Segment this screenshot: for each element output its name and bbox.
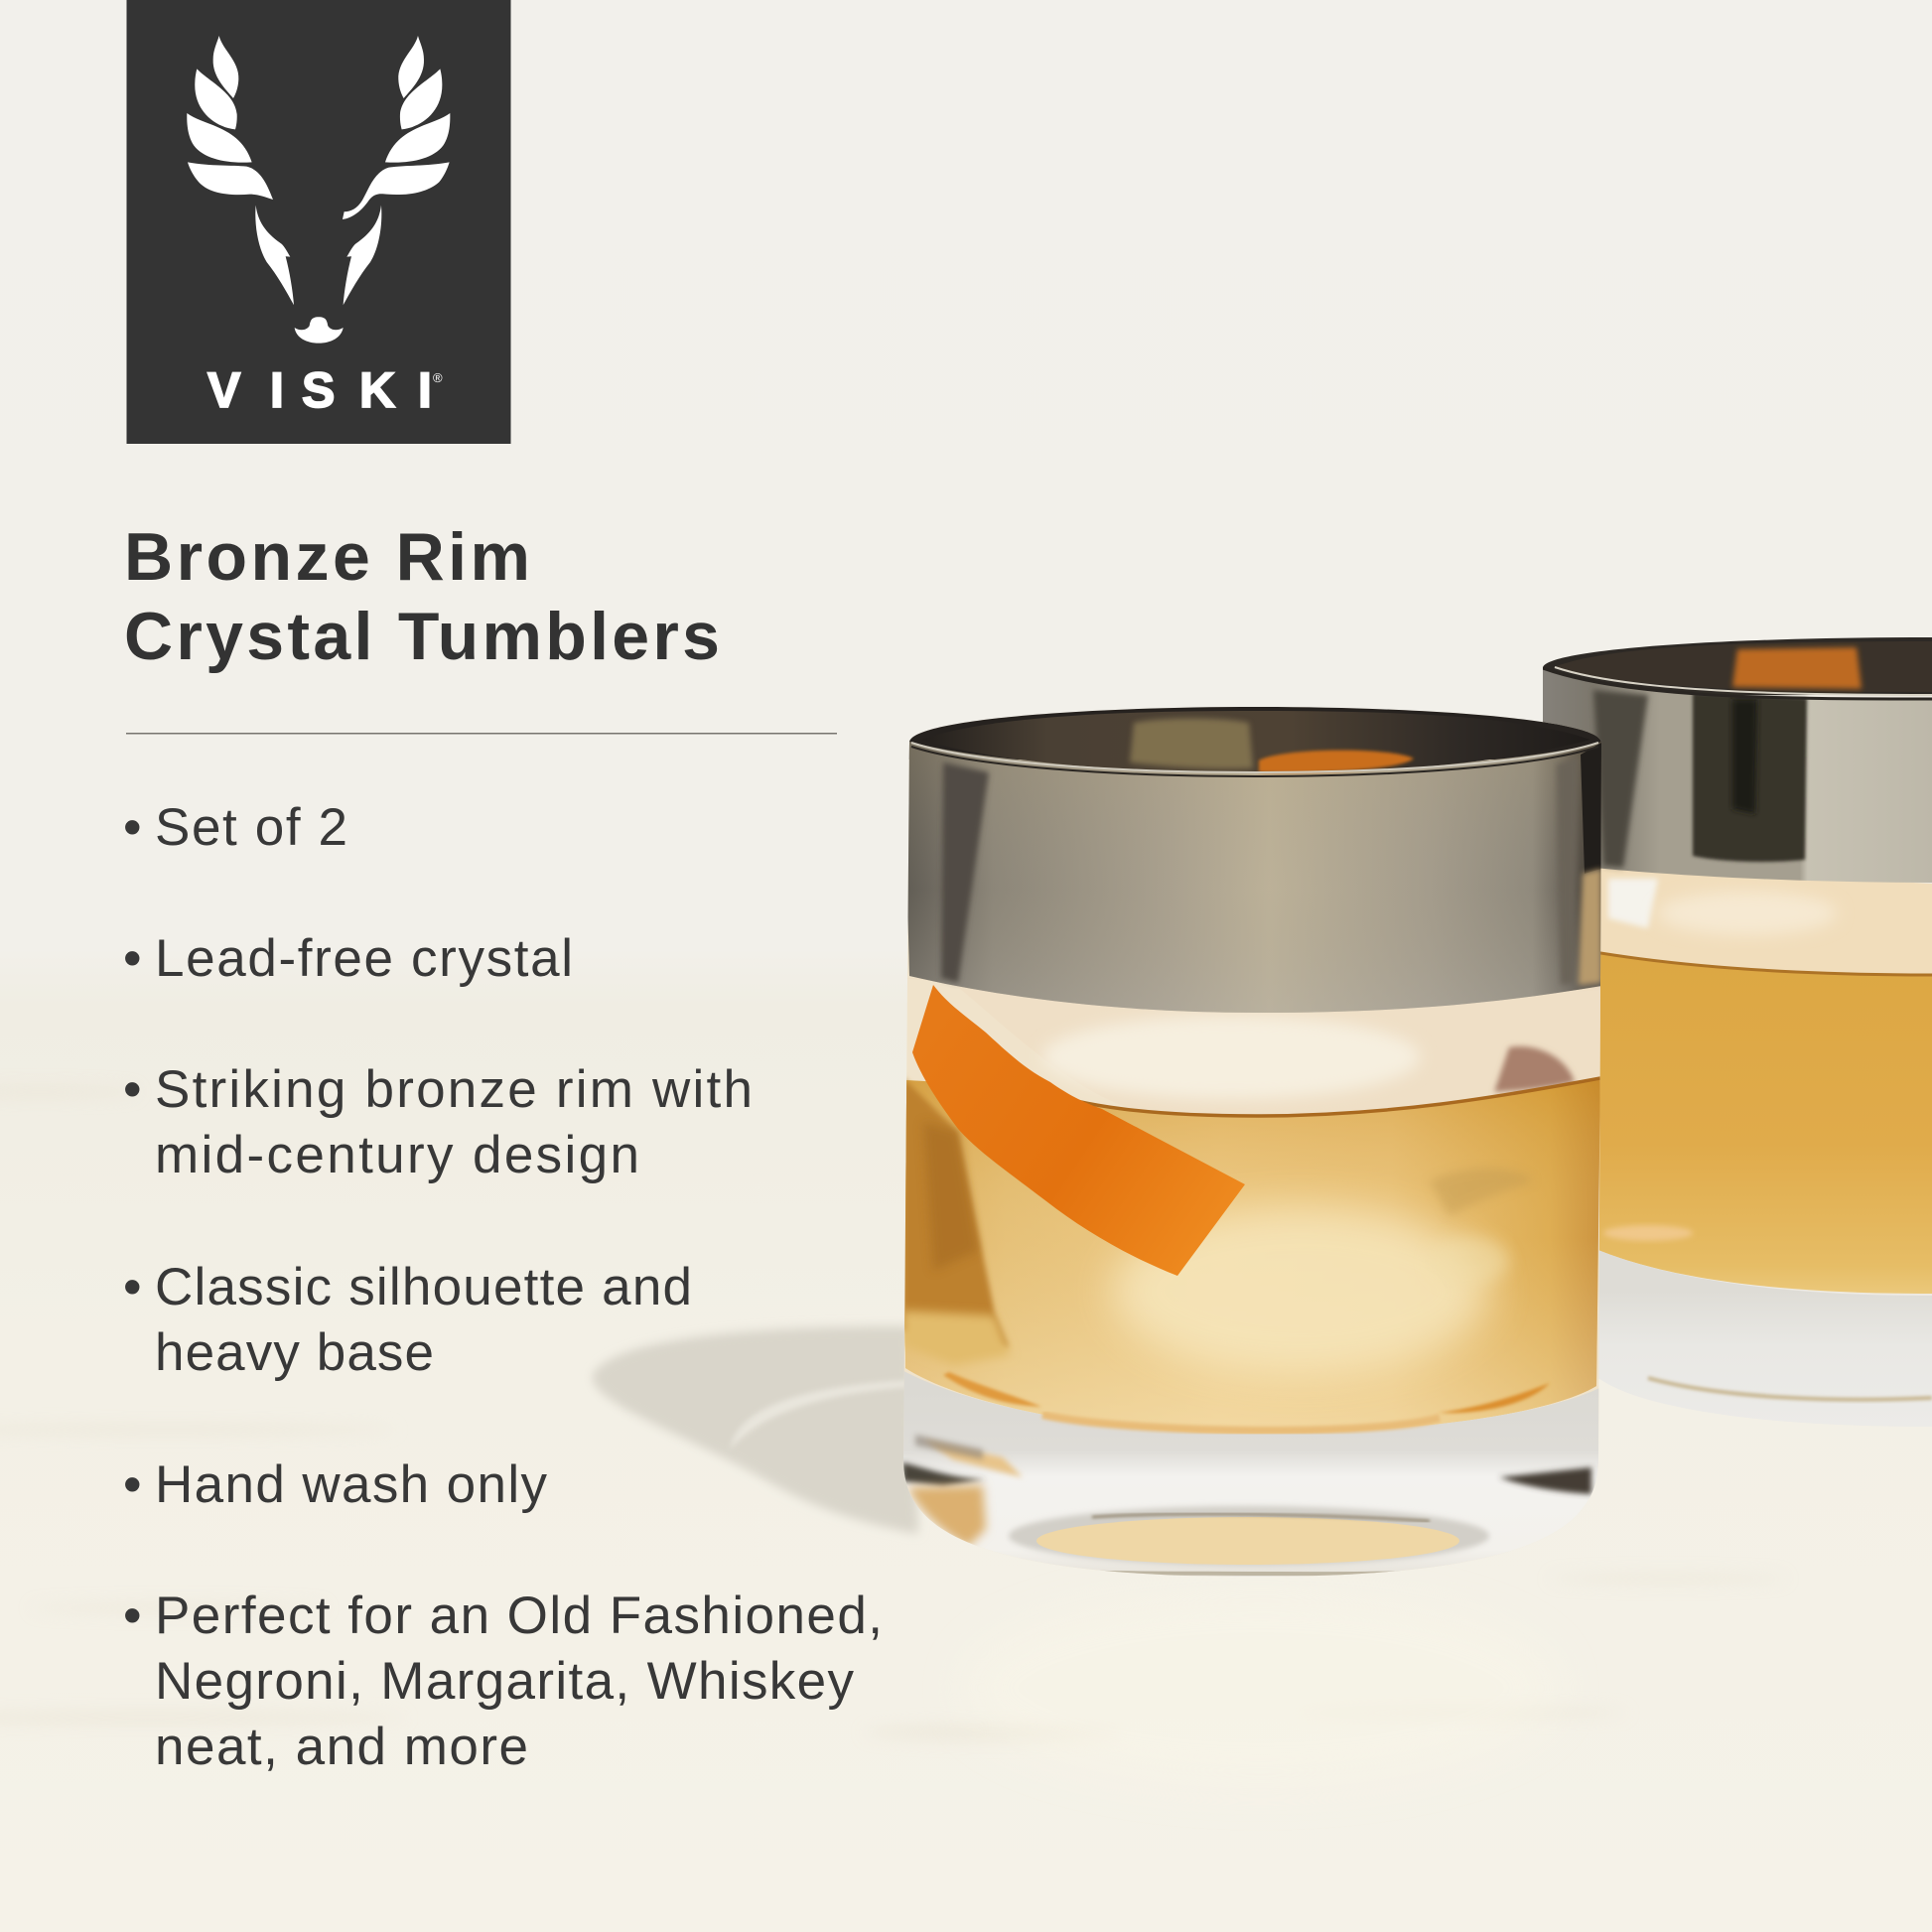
bullet: hand wash: Hand wash only	[155, 1455, 548, 1514]
front glass: rim interior	[957, 711, 1489, 771]
bullet: bronze rim: mid-century design	[155, 1126, 639, 1184]
bullet: silhouette: •	[123, 1258, 142, 1316]
logo: stag antlers and face	[187, 36, 450, 344]
logo panel	[127, 0, 510, 444]
title	[124, 519, 720, 674]
back glass: clear base	[1598, 1251, 1932, 1330]
front glass: orange peel	[912, 985, 1245, 1276]
logo wordmark: VISKI	[207, 362, 432, 418]
front glass: whiskey	[905, 1078, 1600, 1434]
bullet: silhouette	[123, 1258, 692, 1382]
bullet: hand wash: •	[123, 1455, 142, 1514]
bullet: lead-free crystal: •	[123, 929, 142, 988]
logo registered mark: ®	[433, 370, 443, 385]
bullet: perfect for: •	[123, 1587, 142, 1645]
title: Crystal Tumblers	[124, 599, 720, 674]
front glass: amber block at left	[902, 1077, 1009, 1347]
back glass: whiskey	[1588, 951, 1932, 1294]
back glass: ice zone	[1600, 868, 1932, 973]
front glass: metallic band	[903, 740, 1608, 1013]
bullet: bronze rim	[123, 1060, 753, 1184]
front glass: base inner ellipse	[1009, 1506, 1489, 1566]
front glass tumbler	[898, 700, 1608, 1584]
front glass: ice above whiskey	[1600, 993, 1601, 1082]
divider	[126, 733, 837, 735]
title: Bronze Rim	[124, 519, 530, 595]
bullet: set of 2: •	[123, 798, 142, 857]
front glass: clear heavy base	[898, 1368, 1608, 1584]
glass shadow on table	[593, 1326, 918, 1534]
bullet: silhouette: Classic silhouette and	[155, 1258, 692, 1316]
bullet: bronze rim: •	[123, 1060, 142, 1119]
bullet: perfect for: Negroni, Margarita, Whiskey	[155, 1652, 854, 1711]
bullet: perfect for	[123, 1587, 883, 1776]
back glass tumbler	[1529, 635, 1932, 1430]
back glass: metallic band	[1543, 668, 1932, 883]
bullet: bronze rim: Striking bronze rim with	[155, 1060, 753, 1119]
back glass: rim interior	[1554, 641, 1932, 692]
bullet: perfect for: Perfect for an Old Fashioned,	[155, 1587, 883, 1645]
bullet: perfect for: neat, and more	[155, 1718, 528, 1776]
bullet: set of 2: Set of 2	[155, 798, 347, 857]
bullet: silhouette: heavy base	[155, 1323, 434, 1382]
bullet: lead-free crystal: Lead-free crystal	[155, 929, 573, 988]
feature list	[123, 798, 883, 1776]
